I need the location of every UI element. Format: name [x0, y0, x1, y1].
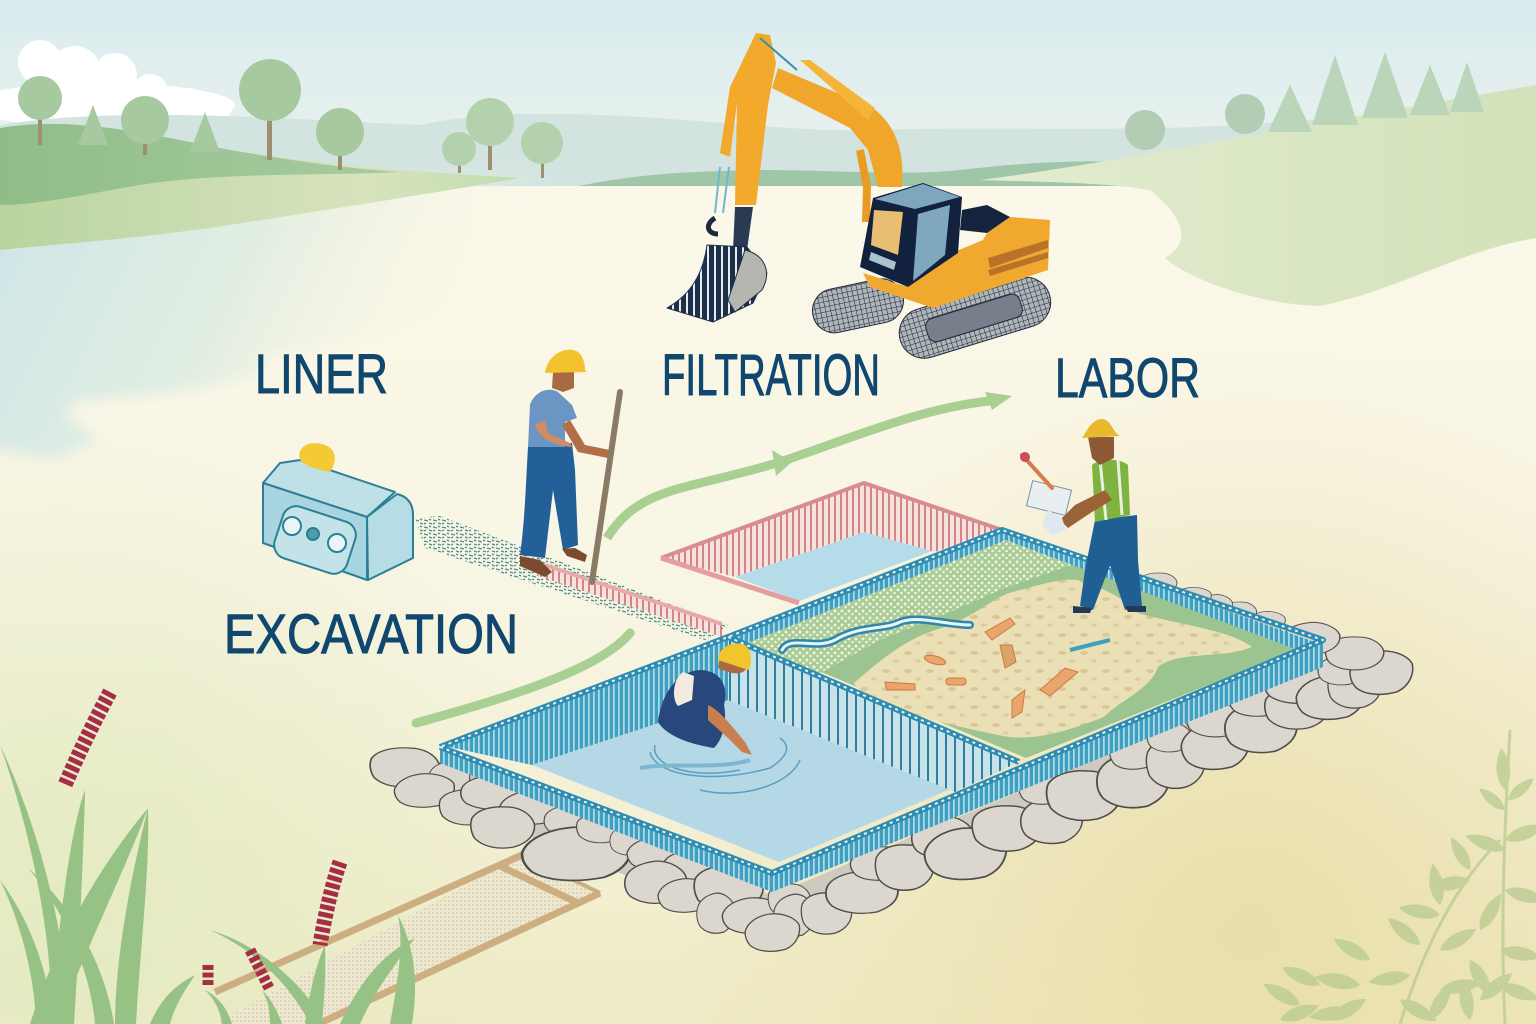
heading: liner: LINER [255, 342, 388, 405]
clouds [0, 40, 235, 127]
water [0, 170, 623, 460]
heading: filtration: FILTRATION [662, 343, 880, 408]
cab [860, 183, 962, 287]
left green bank [0, 124, 520, 250]
hard hat [718, 643, 751, 670]
panel: excavation bed [745, 538, 1303, 758]
inner back wall [440, 637, 728, 765]
bones and artifacts [885, 618, 1110, 718]
body [863, 217, 1050, 308]
engine box [960, 205, 1010, 233]
green flow arrow to labor [607, 392, 1012, 538]
front track [893, 271, 1057, 364]
heading: labor: LABOR [1055, 346, 1200, 409]
heading: excavation: EXCAVATION [224, 602, 518, 665]
background sky [0, 0, 1536, 200]
hard hat [545, 350, 587, 373]
excavator [667, 33, 1057, 364]
far wall [728, 530, 1323, 652]
stick and boom [772, 68, 903, 187]
worker in the water [640, 643, 800, 793]
distant hills [0, 110, 1536, 200]
worker with pole [520, 350, 620, 582]
back red pool [661, 483, 1002, 603]
bush bottom right [1260, 730, 1536, 1024]
hat [1082, 419, 1120, 438]
red strip [538, 565, 722, 637]
red flower spikes [65, 692, 340, 990]
grasses bottom left [0, 745, 415, 1024]
front wall [440, 642, 1323, 892]
gravel trail [415, 516, 730, 640]
plank walkway [215, 855, 600, 1024]
blue pool walls [440, 530, 1323, 892]
bucket [733, 207, 753, 250]
rims [440, 530, 1323, 873]
green flow arrow from excavation [416, 633, 630, 723]
rear track [808, 275, 908, 337]
liner machine [263, 443, 413, 580]
hose [782, 620, 970, 650]
pole [592, 392, 620, 582]
water ripples [640, 738, 800, 793]
stones border [370, 573, 1413, 951]
icon: yellow cap on machine [299, 443, 335, 472]
sand area [854, 580, 1252, 738]
worker with clipboard [1020, 419, 1146, 613]
panel: pool water [532, 700, 1019, 862]
right green hill [980, 85, 1536, 306]
fence divider [728, 640, 1019, 792]
trees left [18, 59, 563, 178]
trees right [1125, 52, 1484, 150]
